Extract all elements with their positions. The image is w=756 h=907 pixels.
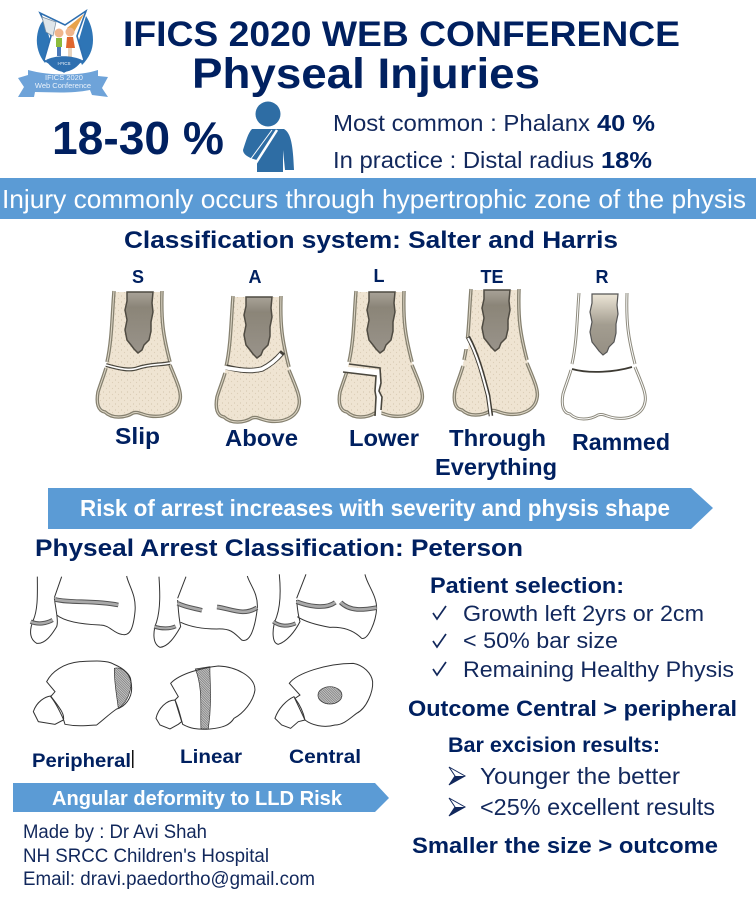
diagram: TE through everything: Everything — [435, 454, 557, 480]
diagram: TE through everything: TE — [480, 267, 504, 287]
diagram: central ankle — [273, 574, 377, 644]
text: smaller size outcome: Smaller the size > outcome — [412, 833, 718, 858]
diagram: L lower — [338, 266, 422, 451]
diagram: TE through everything: Through — [449, 425, 546, 451]
list: selection criteria — [433, 601, 734, 682]
credits: NH SRCC Children's Hospital — [23, 846, 269, 867]
diagram: S slip — [97, 267, 180, 449]
credits: Made by : Dr Avi Shah — [23, 822, 207, 843]
panel: patient selection: Patient selection: — [430, 573, 624, 598]
list: selection criteria: Remaining Healthy Physis — [463, 657, 734, 682]
arrow: risk of arrest: Risk of arrest increases with severity and physis shape — [80, 495, 670, 521]
arrow: angular deformity — [13, 783, 389, 812]
heading: classification system: Classification system: Salter and Harris — [124, 227, 618, 254]
panel: bar excision results — [448, 734, 715, 820]
panel: bar excision results: Bar excision results: — [448, 734, 660, 757]
panel: Peterson diagrams — [31, 574, 377, 772]
diagram: R rammed: Rammed — [572, 429, 670, 455]
text: in practice site: In practice : Distal radius — [333, 147, 594, 173]
heading: Peterson classification: Physeal Arrest Classification: Peterson — [35, 535, 523, 562]
arrow: angular deformity: Angular deformity to LLD Risk — [52, 788, 343, 810]
diagram: central bar — [275, 663, 373, 728]
logo: IFICS 2020 web conference — [18, 11, 108, 97]
subtitle: Physeal Injuries — [192, 50, 540, 98]
diagram: A above — [216, 267, 299, 451]
diagram: L lower: L — [374, 266, 384, 286]
panel: patient selection — [430, 573, 734, 682]
diagram: linear ankle — [154, 576, 257, 647]
diagram: TE through everything — [435, 267, 557, 480]
panel: bar excision results: <25% excellent results — [480, 794, 715, 820]
diagram: S slip: Slip — [115, 423, 160, 449]
logo: IFICS 2020 web conference: Web Conference — [35, 81, 91, 90]
diagram: linear bar — [156, 666, 255, 729]
diagram: peripheral ankle — [31, 576, 135, 643]
banner: injury zone: Injury commonly occurs through hypertrophic zone of the physis — [2, 184, 746, 214]
diagram: R rammed — [562, 267, 670, 455]
diagram: A above: Above — [225, 425, 298, 451]
diagram: S slip: S — [132, 267, 144, 287]
diagram: A above: A — [248, 267, 262, 287]
text: most common site: 40 % — [597, 110, 655, 136]
diagram: peripheral bar — [33, 661, 132, 726]
icon: person with arm sling — [243, 102, 294, 172]
panel: bar excision results: Younger the better — [480, 763, 680, 789]
arrow: risk of arrest — [48, 488, 713, 529]
text: most common site: Most common : Phalanx — [333, 110, 591, 136]
diagram: R rammed: R — [596, 267, 608, 287]
label: central: Central — [289, 746, 361, 768]
logo: IFICS 2020 web conference: I-FICS — [58, 61, 70, 66]
panel: Salter-Harris diagrams — [97, 266, 670, 480]
diagram: L lower: Lower — [349, 425, 419, 451]
list: selection criteria: < 50% bar size — [463, 628, 618, 653]
title: IFICS 2020 WEB CONFERENCE — [123, 15, 680, 54]
logo: IFICS 2020 web conference: IFICS 2020 — [45, 73, 83, 82]
statistic: incidence: 18-30 % — [52, 112, 224, 164]
text: outcome central: Outcome Central > peripheral — [408, 696, 737, 721]
label: peripheral: Peripheral — [32, 750, 131, 772]
credits: Email: dravi.paedortho@gmail.com — [23, 869, 315, 890]
label: linear: Linear — [180, 746, 242, 768]
list: selection criteria: Growth left 2yrs or 2cm — [463, 601, 704, 626]
credits — [23, 822, 315, 890]
text: in practice site: 18% — [601, 147, 652, 173]
